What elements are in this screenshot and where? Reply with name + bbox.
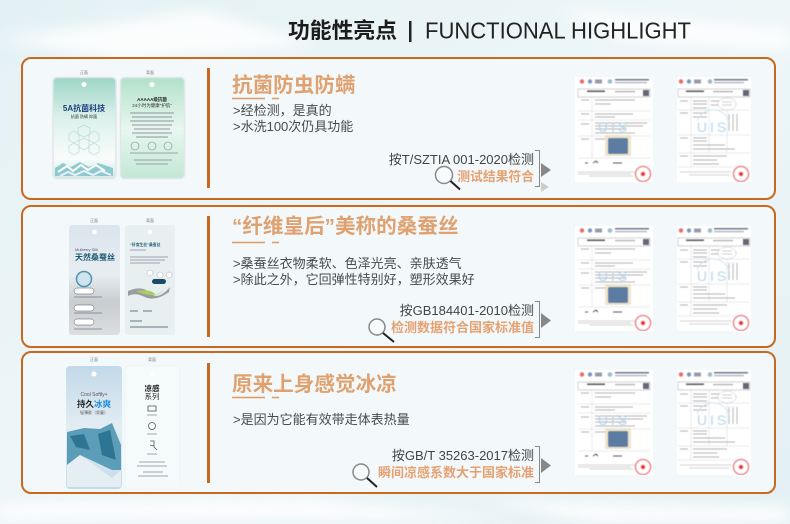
heading underline [232,396,279,398]
title [288,18,691,44]
hang tags: silk [69,217,175,335]
heading: “纤维皇后”美称的桑蚕丝 [232,215,459,238]
title: 功能性亮点 [288,18,397,43]
hang tags: silk: “好食生丝”桑蚕丝 [130,242,161,247]
test standard [378,448,534,480]
hang tags: cooling: 正面 [90,357,98,362]
divider bar [207,68,210,188]
hang tags: antibacterial: 正面 [80,70,88,75]
hang tags: antibacterial: 背面 [146,69,154,75]
test standard [391,303,534,335]
hang tags: antibacterial: 24小时为健康“护航” [132,102,172,109]
panel: antibacterial [22,58,775,199]
divider bar [207,216,210,337]
hang tags: antibacterial: 5A抗菌科技 [63,103,105,113]
arrow bracket [535,150,551,192]
description [233,103,353,134]
arrow bracket [535,302,551,338]
description: >经检测，是真的 [233,103,332,118]
description: >是因为它能有效带走体表热量 [233,412,410,427]
title: FUNCTIONAL HIGHLIGHT [425,18,691,44]
hang tags: silk: 天然桑蚕丝 [75,252,115,262]
hang tags: cooling: 持久冰爽 [77,399,112,409]
heading underline [232,98,279,100]
test standard: 按GB/T 35263-2017检测 [392,448,534,463]
test standard: 瞬间凉感系数大于国家标准 [378,465,534,480]
description: >桑蚕丝衣物柔软、色泽光亮、亲肤透气 [233,256,462,271]
hang tags: silk: Mulberry Silk [75,247,98,252]
hang tags: cooling [66,356,180,489]
heading: 抗菌防虫防螨 [232,73,356,97]
icon: magnifier [353,464,377,487]
panel: mulberry silk [22,206,775,347]
hang tags: cooling: 轻薄款（男童） [80,409,108,415]
test standard: 检测数据符合国家标准值 [391,320,534,335]
panel: cooling [22,352,775,493]
hang tags: antibacterial [53,69,184,178]
arrow bracket [535,446,551,482]
description: >除此之外，它回弹性特别好，塑形效果好 [233,272,475,287]
hang tags: cooling: 背面 [148,356,156,362]
test report documents [575,77,751,182]
hang tags: antibacterial: AAAAA级抗菌 [137,96,167,103]
heading underline [232,242,279,244]
hang tags: cooling: 凉感 [144,383,160,393]
hang tags: cooling: Cool Softly+ [80,392,108,398]
icon: magnifier [369,319,394,342]
heading: 原来上身感觉冰凉 [232,373,397,396]
description: >水洗100次仍具功能 [233,119,353,134]
divider bar [207,363,210,483]
test report documents [575,226,751,331]
test standard: 按GB184401-2010检测 [400,303,534,318]
test report documents [575,370,751,475]
icon: magnifier [436,166,460,190]
hang tags: antibacterial: 抗菌 防螨 抑菌 [71,113,97,119]
description [233,256,475,287]
hang tags: silk: 正面 [90,218,98,223]
hang tags: silk: 背面 [146,217,154,223]
hang tags: cooling: 系列 [144,391,160,401]
test standard [389,152,534,184]
test standard: 测试结果符合 [457,169,534,184]
test standard: 按T/SZTIA 001-2020检测 [389,152,534,167]
